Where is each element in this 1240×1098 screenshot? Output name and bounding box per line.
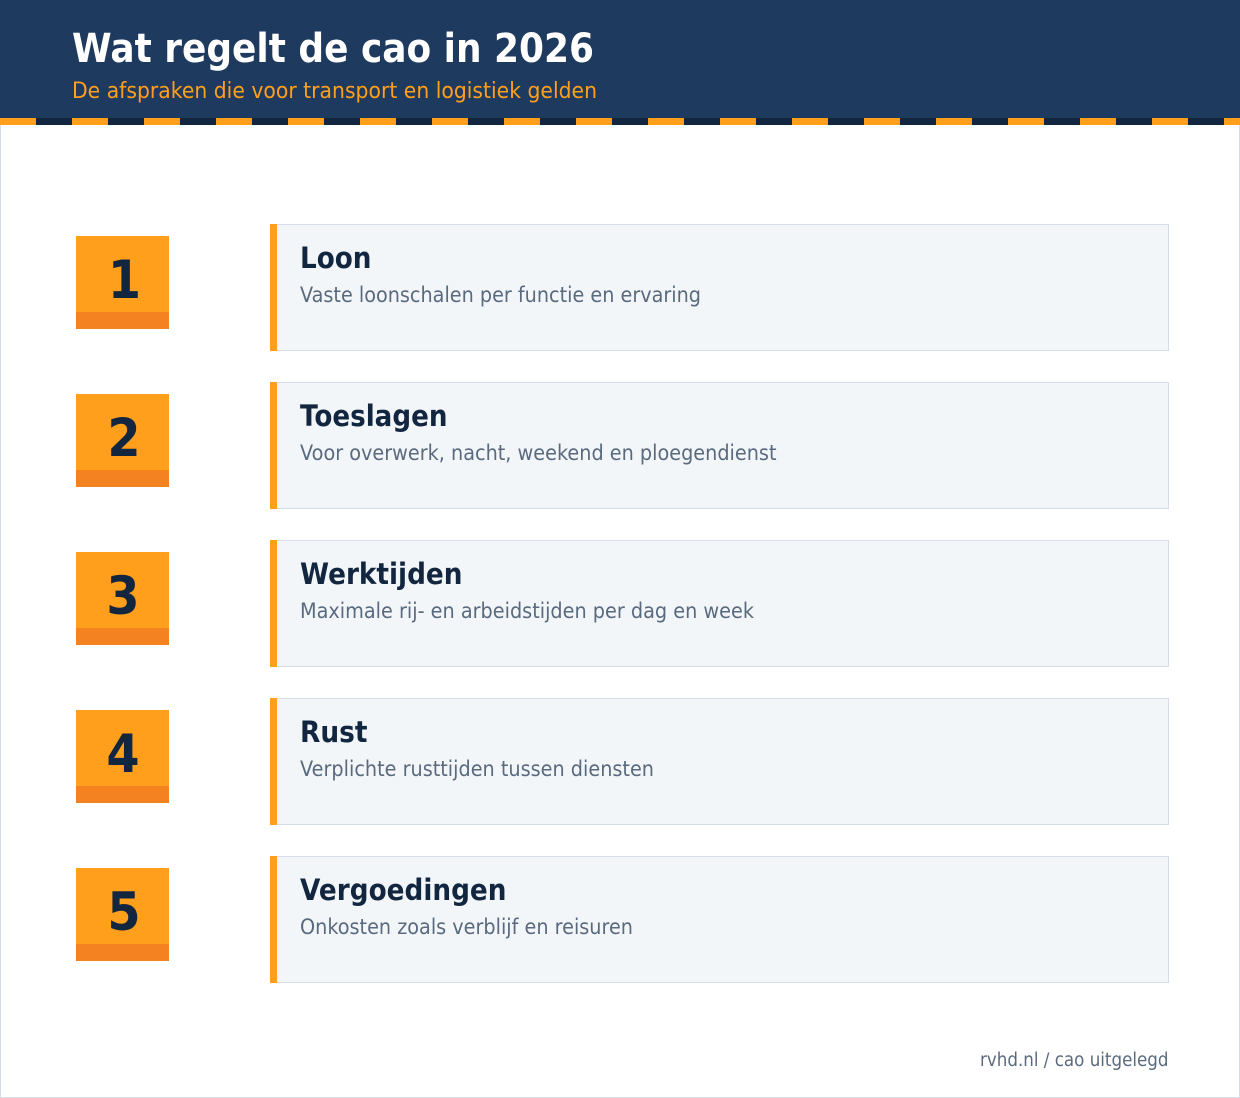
footer credit: rvhd.nl / cao uitgelegd bbox=[980, 1050, 1168, 1071]
panel: Toeslagen: Voor overwerk, nacht, weekend en ploegendienst bbox=[300, 441, 776, 466]
number badge 2: 2 bbox=[107, 408, 141, 469]
header bbox=[0, 0, 1240, 118]
number badge 3: 3 bbox=[106, 566, 140, 627]
panel: Werktijden: Maximale rij- en arbeidstijden per dag en week bbox=[300, 599, 755, 624]
number badge 3 bbox=[76, 552, 169, 645]
number badge 4: 4 bbox=[106, 724, 140, 785]
number badge 5 bbox=[76, 868, 169, 961]
panel: Loon: Loon bbox=[300, 241, 372, 275]
panel: Rust: Rust bbox=[300, 715, 368, 749]
panel: Werktijden bbox=[270, 540, 1168, 667]
panel: Loon: Vaste loonschalen per functie en ervaring bbox=[300, 283, 701, 308]
hazard stripe bbox=[0, 118, 1240, 125]
panel: Rust bbox=[270, 698, 1168, 825]
panel: Vergoedingen: Onkosten zoals verblijf en reisuren bbox=[300, 915, 633, 940]
subtitle: De afspraken die voor transport en logistiek gelden bbox=[72, 78, 597, 104]
panel: Werktijden: Werktijden bbox=[300, 557, 462, 591]
number badge 4 bbox=[76, 710, 169, 803]
number badge 1 bbox=[76, 236, 169, 329]
panel: Loon bbox=[270, 224, 1168, 351]
title: Wat regelt de cao in 2026 bbox=[72, 26, 594, 72]
number badge 1: 1 bbox=[108, 250, 141, 311]
panel: Toeslagen: Toeslagen bbox=[300, 399, 448, 433]
panel: Vergoedingen bbox=[270, 856, 1168, 983]
panel: Rust: Verplichte rusttijden tussen diensten bbox=[300, 757, 654, 782]
panel: Vergoedingen: Vergoedingen bbox=[300, 873, 506, 907]
number badge 2 bbox=[76, 394, 169, 487]
number badge 5: 5 bbox=[107, 882, 141, 943]
panel: Toeslagen bbox=[270, 382, 1168, 509]
